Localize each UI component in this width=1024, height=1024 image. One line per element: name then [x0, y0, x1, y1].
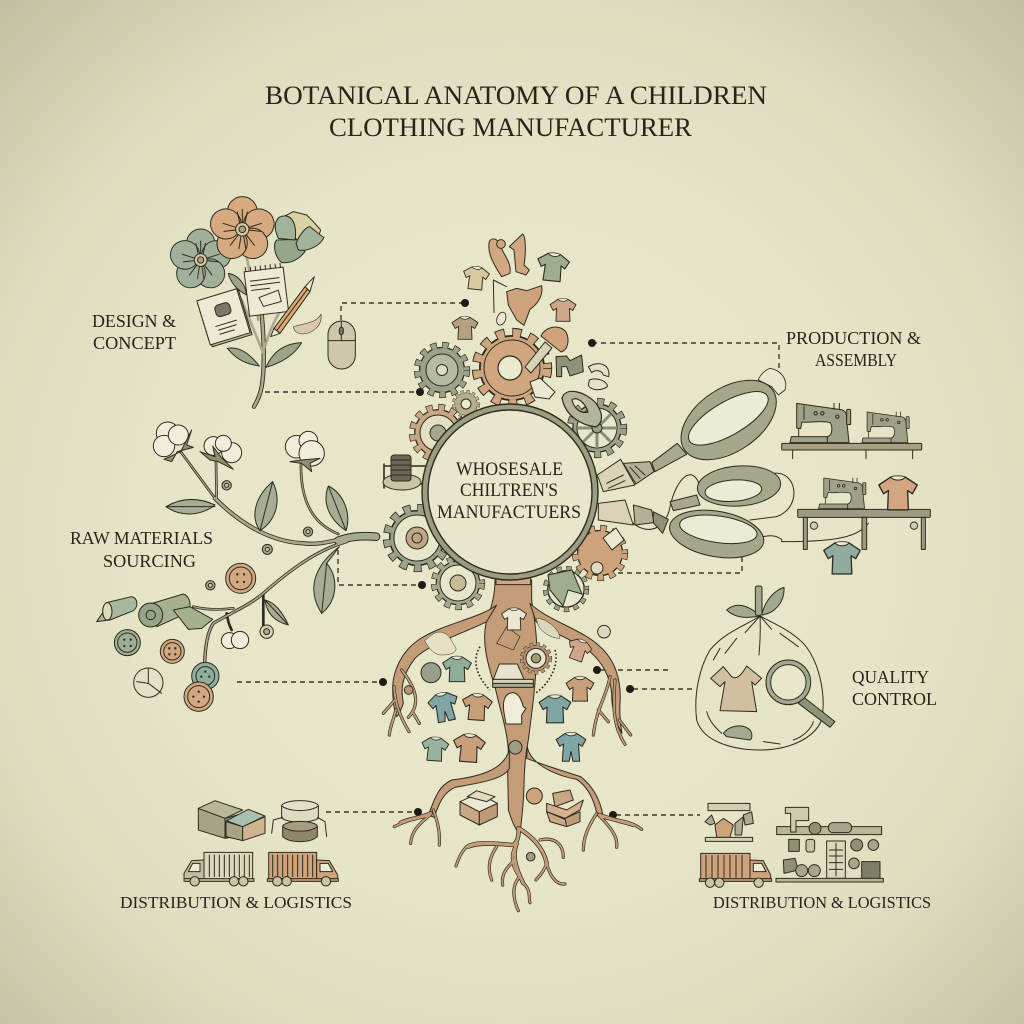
gear in trunk: [522, 644, 550, 672]
label: quality control: [852, 667, 937, 709]
leaves: [227, 273, 302, 367]
icon: small pieces right: [556, 355, 609, 390]
middle lens: [670, 463, 782, 511]
buttons: [114, 481, 313, 711]
central ring: CHILTREN'S: [460, 480, 558, 501]
dashed connector lines: [237, 299, 779, 819]
bag outline: [696, 616, 823, 750]
upper lens: [652, 364, 791, 476]
lower lens: [666, 503, 768, 565]
flower ornament: [526, 788, 542, 804]
icon: sleeve pieces: [489, 234, 542, 326]
icon: open box left: [460, 791, 497, 825]
icon: truck right: [267, 852, 338, 886]
leaves and stem: [727, 605, 760, 617]
icon: stone: [723, 726, 752, 740]
label: raw materials sourcing: SOURCING: [103, 551, 196, 571]
label: raw materials sourcing: RAW MATERIALS: [70, 528, 213, 548]
central ring: [422, 404, 598, 580]
work table with sewing machine and shirts: [798, 478, 930, 549]
gear: orange right: [575, 528, 625, 578]
label: quality control: CONTROL: [852, 689, 937, 709]
label: production and assembly: PRODUCTION &: [786, 328, 921, 348]
label: design and concept: [92, 311, 176, 353]
icon: shirt: [711, 666, 762, 712]
thread loops: [633, 473, 868, 542]
notebook: [197, 288, 252, 347]
title: [265, 81, 767, 142]
icon: boxes: [198, 801, 265, 841]
cotton bolls: [153, 422, 324, 649]
orange flower: [207, 197, 278, 265]
icon: orange truck: [699, 853, 772, 887]
label: quality control: QUALITY: [852, 667, 929, 687]
mouse: [328, 321, 355, 369]
distribution right: store and truck: [699, 803, 883, 887]
roots: tree trunk with clothing: [383, 577, 642, 911]
icon: blue shirt under table: [824, 542, 860, 574]
spool: [383, 455, 425, 490]
branch stems: [181, 452, 377, 663]
icon: clothing rack: [705, 803, 753, 841]
upper shelf with sewing machines: [782, 403, 922, 459]
note pad: [244, 263, 289, 316]
icon: open box right: [547, 790, 583, 827]
gear: flag: [546, 569, 586, 609]
gear: bottom green: [434, 559, 482, 607]
gear: large orange: [477, 327, 568, 403]
icon: shirts: [462, 265, 490, 291]
icon: orange shirt on table: [879, 476, 917, 510]
green flower: [167, 229, 235, 293]
scalloped gear arcs beside trunk: [476, 647, 556, 693]
plant: design and concept bouquet: [167, 197, 355, 407]
central ring: MANUFACTUERS: [437, 502, 581, 523]
central label: WHOSESALE: [456, 459, 563, 480]
falling clothing cluster above gears: [452, 234, 609, 390]
icon: magnifying glass: [766, 660, 835, 727]
fabric rolls: [97, 594, 213, 629]
label: design and concept: CONCEPT: [93, 333, 176, 353]
gear: green upper left: [417, 345, 467, 395]
label: raw materials sourcing: [70, 528, 213, 571]
label: production and assembly: [786, 328, 921, 370]
fine roots: [383, 670, 642, 911]
label: production and assembly: ASSEMBLY: [815, 350, 897, 370]
stem: [254, 313, 264, 407]
upper ferrule: [597, 459, 654, 492]
root system: [393, 580, 622, 833]
scissors and loupe tools: [597, 364, 930, 565]
quality control bag: [696, 586, 835, 750]
bud: [275, 212, 324, 263]
icon: truck left: [184, 852, 254, 886]
gears behind the central ring: [383, 327, 625, 609]
icon: warehouse shelves: [776, 807, 883, 882]
icon: t-shirts among roots: [421, 608, 594, 763]
gear: small tan: [454, 392, 478, 416]
gear: green right: [562, 391, 623, 454]
label: distribution and logistics right: DISTRIBUTION & LOGISTICS: [713, 893, 931, 912]
gear: orange left: [412, 407, 464, 459]
title: BOTANICAL ANATOMY OF A CHILDREN: [265, 81, 767, 110]
label: design and concept: DESIGN &: [92, 311, 176, 331]
petal: [293, 314, 321, 334]
small floral blob: [421, 663, 441, 683]
small ornaments: [404, 686, 413, 694]
pencil: [271, 277, 314, 337]
lower ferrule: [598, 500, 668, 533]
collar: [496, 577, 531, 585]
icon: fabric spool stack: [272, 801, 327, 842]
leaves: [166, 482, 348, 625]
gear: green lower left: [387, 508, 447, 568]
left branch: raw materials: [97, 422, 377, 711]
inner trunk details: [425, 618, 560, 754]
title: CLOTHING MANUFACTURER: [329, 113, 693, 142]
distribution left: boxes and trucks: [184, 801, 338, 886]
label: distribution and logistics left: DISTRIBUTION & LOGISTICS: [120, 893, 352, 912]
